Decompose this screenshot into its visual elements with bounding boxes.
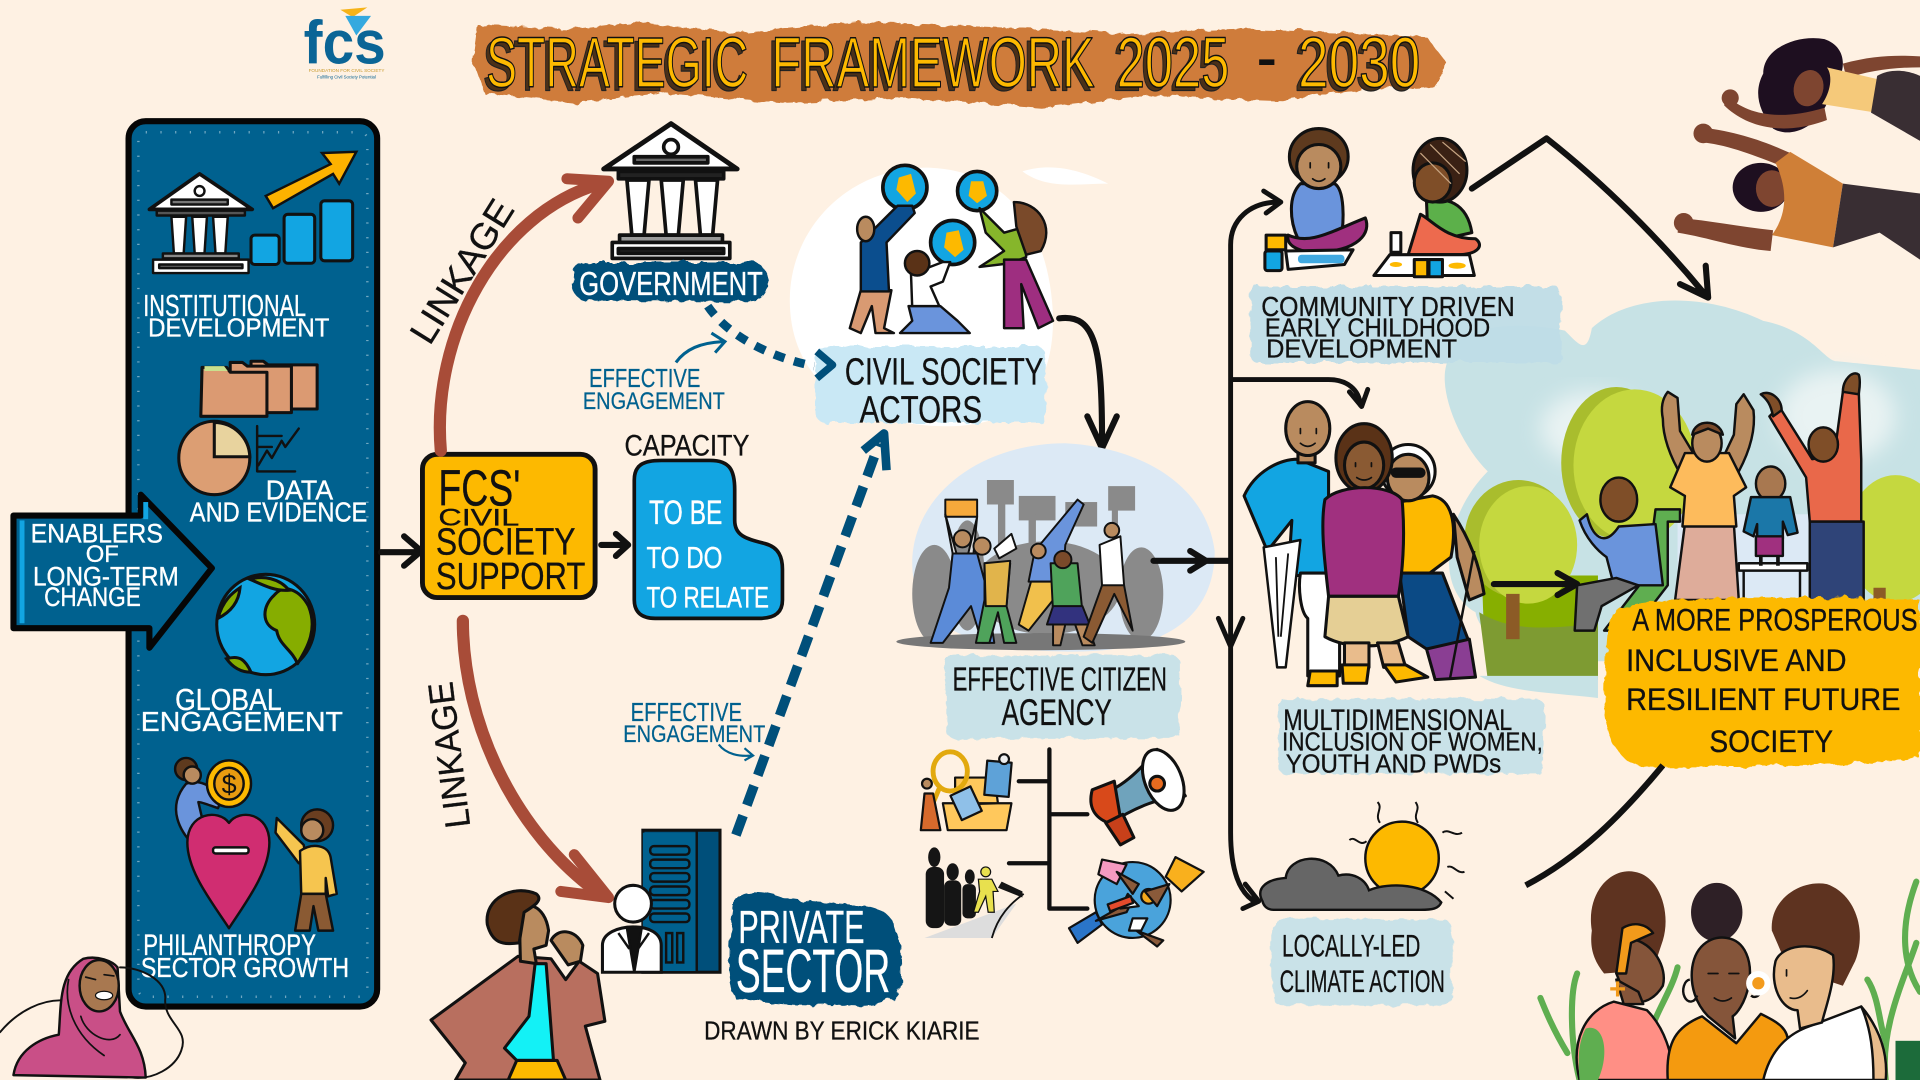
label: private sector: PRIVATE xyxy=(738,901,864,953)
icon: globe xyxy=(217,574,315,675)
text: data and evidence: DATA xyxy=(266,475,333,506)
text: data and evidence: AND EVIDENCE xyxy=(190,497,367,528)
text: effective engagement upper: ENGAGEMENT xyxy=(583,388,725,415)
text: capacity: CAPACITY xyxy=(624,430,749,463)
box: future society outcome xyxy=(1604,597,1920,767)
text: linkage upper: LINKAGE xyxy=(402,192,522,351)
icon: office building and businessperson xyxy=(602,830,720,972)
title: STRATEGIC xyxy=(486,24,748,103)
text: effective engagement lower xyxy=(623,699,765,760)
text: philanthropy sector growth: PHILANTHROPY xyxy=(143,929,316,962)
box: capacity: TO DO xyxy=(647,541,722,575)
icon: government building large xyxy=(604,124,737,258)
text: global engagement xyxy=(141,683,343,737)
icon: people with disabilities group xyxy=(1244,402,1484,686)
text: credit: DRAWN BY ERICK KIARIE xyxy=(704,1018,980,1046)
title: 2030 xyxy=(1298,24,1420,103)
text: effective engagement lower: EFFECTIVE xyxy=(631,699,742,727)
title: 2025 xyxy=(1113,28,1226,107)
box: capacity xyxy=(634,460,782,618)
logo: fcs: Fulfilling Civil Society Potential xyxy=(317,74,376,79)
arrow: linkage to private sector xyxy=(463,621,609,898)
title: 2030 xyxy=(1294,28,1417,107)
icon: growth arrow xyxy=(266,152,356,208)
line: future society to women xyxy=(1526,765,1663,885)
icon: thinking man in jacket xyxy=(431,891,605,1080)
big cloud background for future society xyxy=(1445,300,1920,698)
text: linkage lower: LINKAGE xyxy=(421,680,478,830)
label: effective citizen agency xyxy=(945,655,1180,738)
arrow: enablers of long-term change: LONG-TERM xyxy=(33,561,179,591)
arrow: enablers of long-term change: OF xyxy=(86,541,119,568)
icon: line chart xyxy=(257,426,299,471)
icon: growth bars xyxy=(251,201,353,264)
hands: badges xyxy=(883,165,997,264)
text: global engagement: ENGAGEMENT xyxy=(141,706,343,737)
icon: folder and evidence review xyxy=(921,752,1012,830)
icon: folders xyxy=(201,361,317,416)
label: effective citizen agency: AGENCY xyxy=(1002,692,1112,733)
arrow: enablers of long-term change xyxy=(13,495,212,648)
label: multidimensional inclusion: YOUTH AND PWDs xyxy=(1286,751,1501,779)
icon: philanthropy heart and donors xyxy=(175,758,337,931)
box: FCS' civil society support xyxy=(422,454,595,598)
text: global engagement: GLOBAL xyxy=(175,683,282,717)
connector: branches to outcomes xyxy=(1218,191,1368,909)
arrow: panel to FCS support xyxy=(381,536,421,566)
label: locally-led climate action: LOCALLY-LED xyxy=(1282,927,1420,963)
arrow: FCS to capacity xyxy=(601,534,628,556)
icon: government building (institutional) xyxy=(149,174,252,273)
text: data and evidence xyxy=(190,475,367,528)
icon: citizen agency protest scene xyxy=(896,443,1215,652)
title: - xyxy=(1256,18,1277,97)
icon: philanthropy heart and donors: $ xyxy=(222,769,237,799)
icon: three women with plants xyxy=(1540,871,1920,1080)
label: civil society actors xyxy=(816,347,1046,431)
icon: pie chart xyxy=(179,421,250,495)
label: civil society actors: CIVIL SOCIETY xyxy=(845,351,1043,393)
arrow: enablers of long-term change: CHANGE xyxy=(44,582,141,612)
arrow: to future society xyxy=(1472,138,1708,298)
diagram: citizen agency activities connector xyxy=(1009,749,1087,909)
title xyxy=(482,18,1420,107)
label: civil society actors: ACTORS xyxy=(860,389,982,431)
label: effective citizen agency: EFFECTIVE CITIZEN xyxy=(953,662,1167,699)
box: FCS' civil society support: CIVIL xyxy=(438,504,519,531)
title: STRATEGIC xyxy=(482,28,744,107)
logo: fcs: FOUNDATION FOR CIVIL SOCIETY xyxy=(309,68,385,74)
logo: fcs: fcs xyxy=(304,9,386,77)
arrow: government to civil society (dashed) xyxy=(708,306,833,378)
icon: woman in pink hijab xyxy=(0,958,183,1078)
label: locally-led climate action: CLIMATE ACTION xyxy=(1280,963,1445,999)
text: effective engagement lower: ENGAGEMENT xyxy=(623,721,765,748)
text: philanthropy sector growth xyxy=(141,929,349,983)
title: 2025 xyxy=(1117,24,1229,103)
label: locally-led climate action xyxy=(1272,920,1452,1005)
icon: crowd in line xyxy=(924,847,1024,938)
icon: megaphone xyxy=(1091,744,1192,845)
panel: enablers of long-term change xyxy=(129,121,377,1007)
arrow: citizen agency to outcomes xyxy=(1153,551,1228,571)
arrow: enablers of long-term change: ENABLERS xyxy=(31,518,163,548)
text: institutional development: DEVELOPMENT xyxy=(148,315,330,343)
label: multidimensional inclusion: MULTIDIMENSIONAL xyxy=(1283,704,1512,737)
text: institutional development xyxy=(143,289,330,343)
icon: hands and gear xyxy=(1069,857,1204,947)
box: capacity: TO BE xyxy=(649,494,722,532)
box: future society outcome: SOCIETY xyxy=(1709,723,1833,759)
icon: jumping man top right xyxy=(1674,124,1920,260)
box: future society outcome: RESILIENT FUTURE xyxy=(1626,681,1900,717)
label: multidimensional inclusion: INCLUSION OF WOMEN, xyxy=(1282,729,1543,757)
box: FCS' civil society support: SUPPORT xyxy=(436,556,585,598)
label: multidimensional inclusion xyxy=(1278,699,1544,779)
label: government: GOVERNMENT xyxy=(579,266,763,303)
icon: sun and cloud xyxy=(1260,802,1464,910)
box: FCS' civil society support: SOCIETY xyxy=(436,522,576,564)
arrow: inclusion to future society xyxy=(1494,573,1577,595)
label: private sector: SECTOR xyxy=(736,937,890,1005)
box: future society outcome: INCLUSIVE AND xyxy=(1626,642,1847,678)
label: private sector xyxy=(729,891,901,1006)
text: institutional development: INSTITUTIONAL xyxy=(143,289,306,323)
text: effective engagement upper: EFFECTIVE xyxy=(589,365,700,393)
title: FRAMEWORK xyxy=(771,24,1095,103)
text: effective engagement upper xyxy=(583,333,725,415)
icon: civil society actors figures xyxy=(850,165,1053,333)
blob: civil society white backdrop xyxy=(790,167,1108,426)
label: community driven early childhood development: DEVELOPMENT xyxy=(1266,336,1457,364)
icon: jumping woman top right xyxy=(1722,38,1920,141)
text: philanthropy sector growth: SECTOR GROWTH xyxy=(141,952,349,983)
icon: children painting xyxy=(1265,129,1479,277)
icon: celebrating people and wheelchair user xyxy=(1575,373,1864,631)
box: FCS' civil society support: FCS' xyxy=(438,459,520,517)
icon: three women with plants: + xyxy=(1609,973,1626,1006)
label: community driven early childhood development: COMMUNITY DRIVEN xyxy=(1261,291,1515,322)
arrow: linkage to government xyxy=(440,179,609,451)
label: community driven early childhood development xyxy=(1250,287,1561,364)
title: FRAMEWORK xyxy=(768,28,1091,107)
label: community driven early childhood development: EARLY CHILDHOOD xyxy=(1265,315,1490,343)
title banner xyxy=(473,18,1447,108)
arrow: private sector to civil society (dashed) xyxy=(736,433,887,835)
box: capacity: TO RELATE xyxy=(647,581,769,614)
arrow: civil society to citizen agency xyxy=(1059,318,1117,448)
